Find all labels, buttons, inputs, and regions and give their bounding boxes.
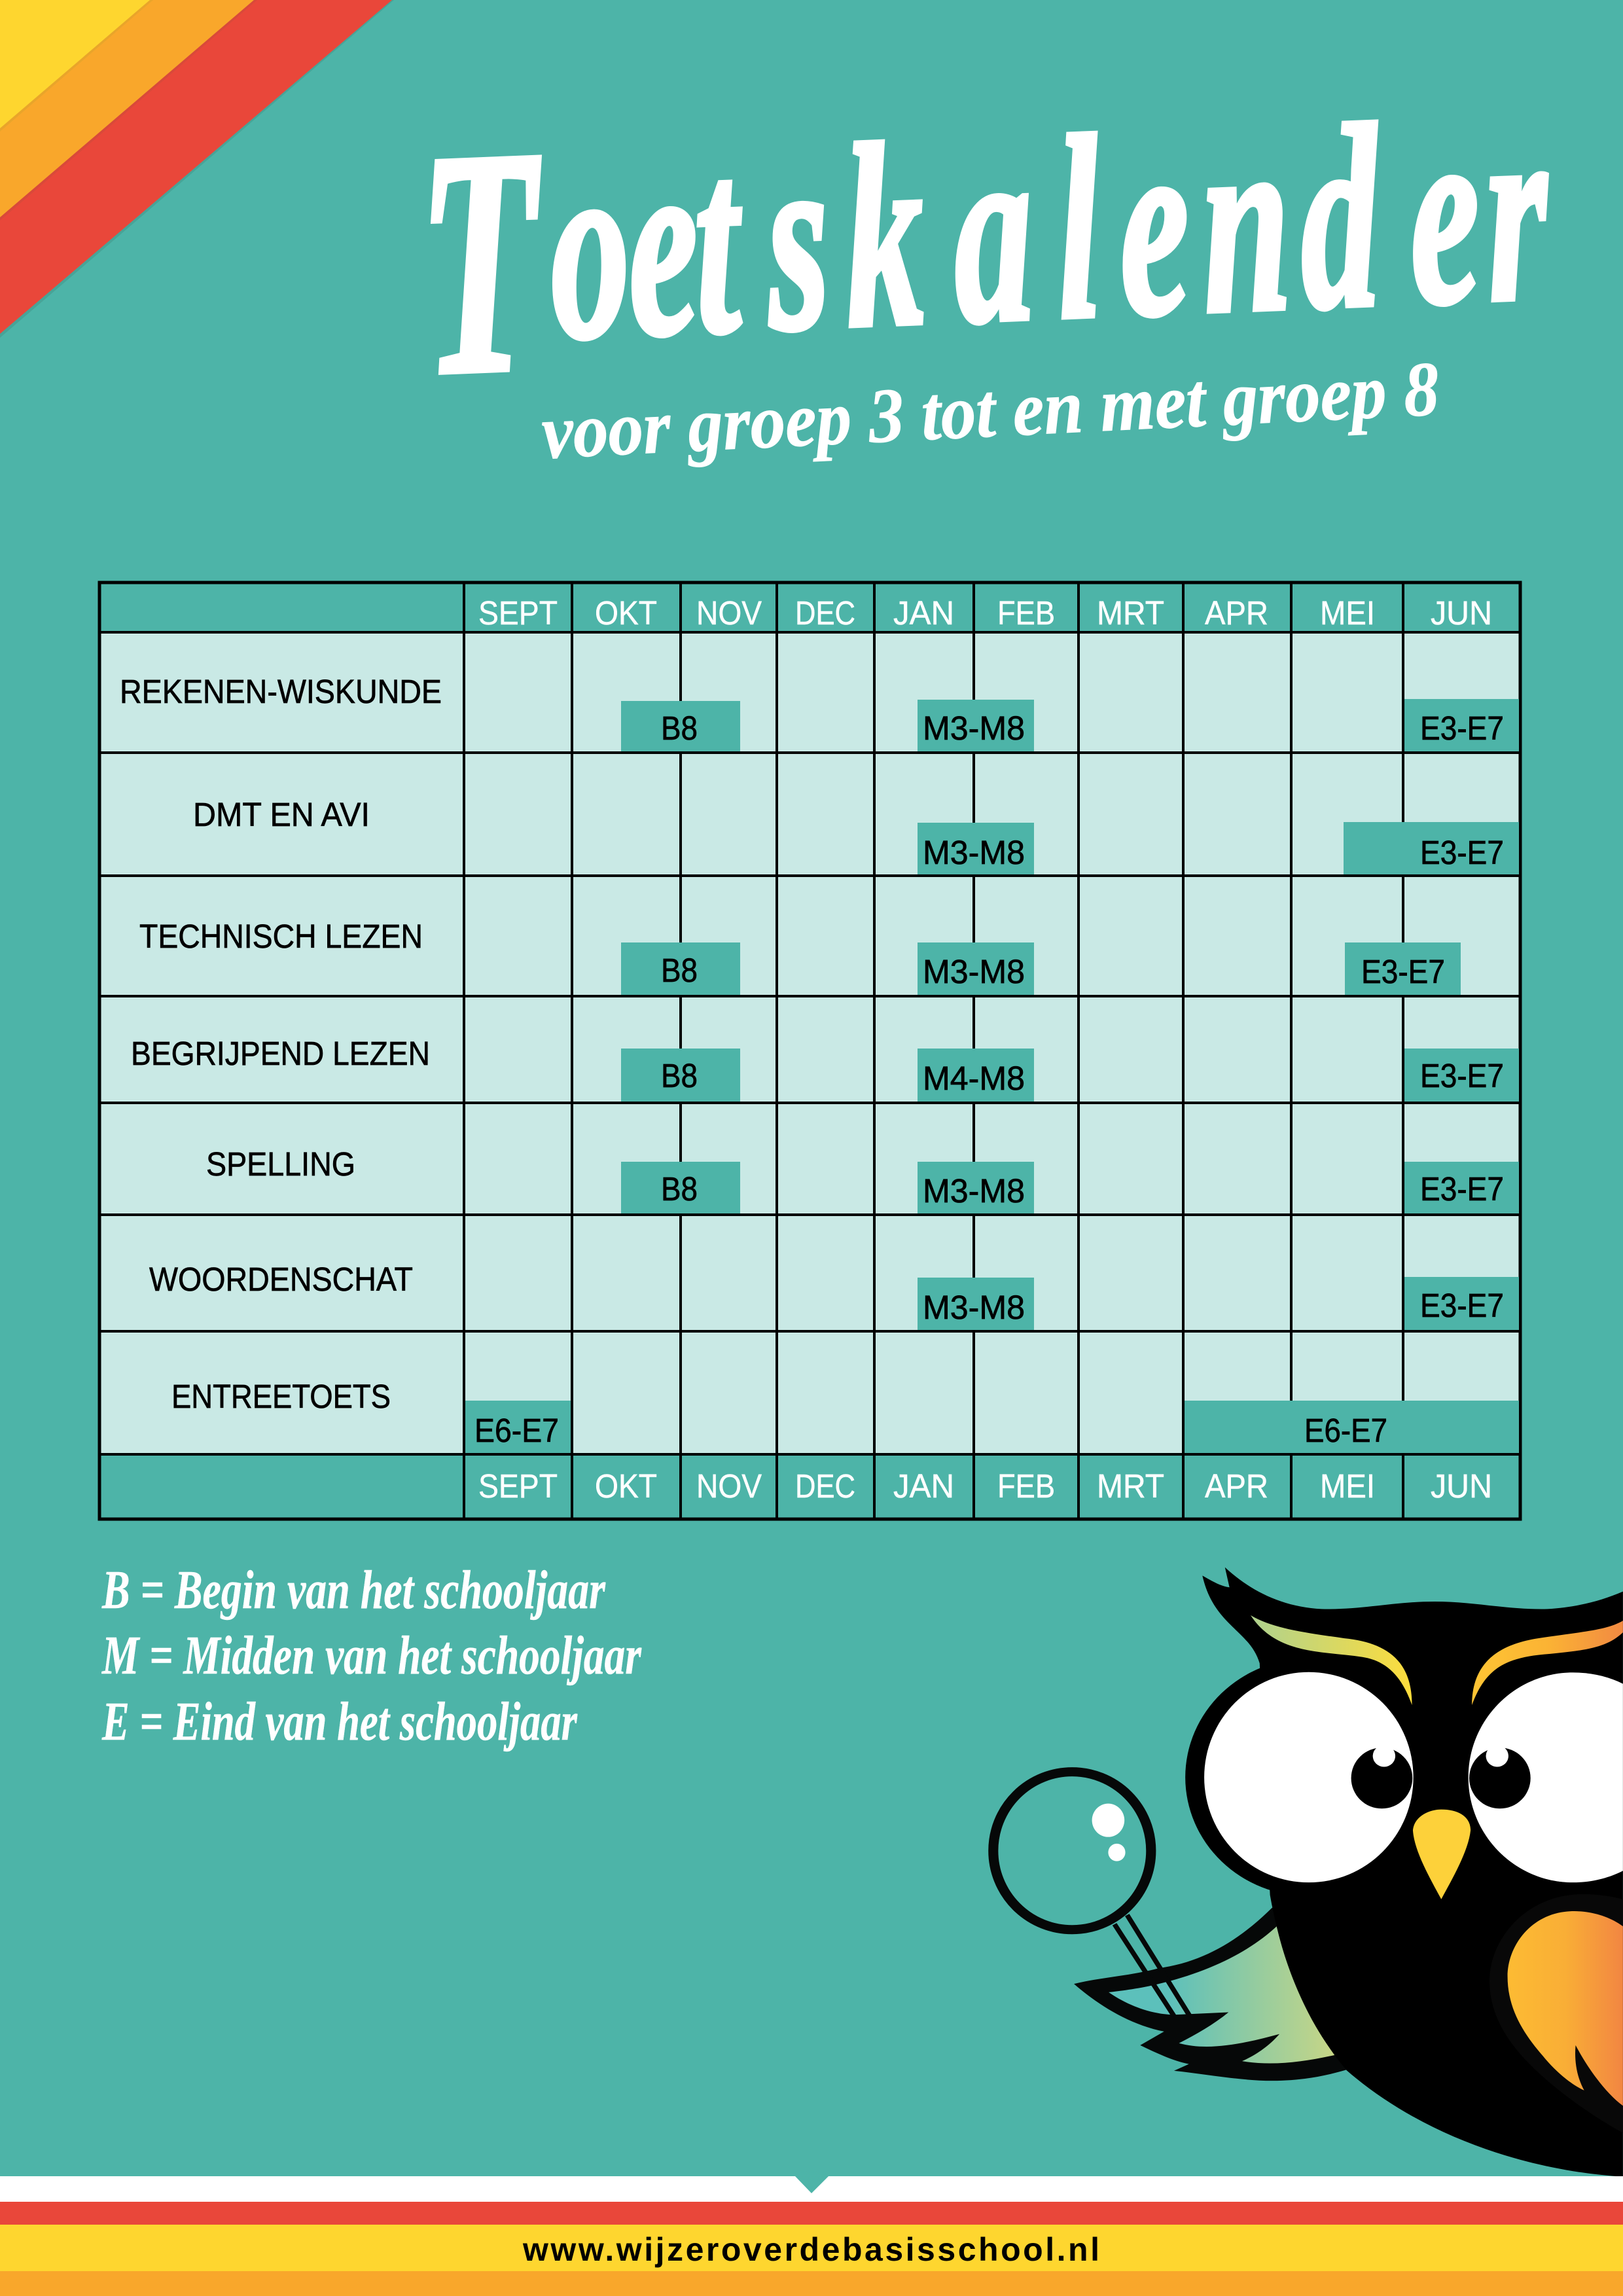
owl beak bbox=[1413, 1810, 1471, 1899]
row: spelling bars: M3-M8 bbox=[923, 1172, 1025, 1210]
table grid bbox=[99, 583, 1520, 1519]
row: woordenschat bars: E3-E7 bbox=[1420, 1287, 1504, 1324]
row: entreetoets bars bbox=[465, 1401, 1519, 1453]
row labels: REKENEN-WISKUNDE bbox=[120, 673, 442, 710]
top month header: NOV bbox=[696, 594, 762, 632]
row: technisch lezen bars bbox=[621, 942, 1461, 995]
row labels bbox=[120, 673, 442, 1415]
owl left eye bbox=[1204, 1672, 1414, 1882]
row: technisch lezen bars: M3-M8 bbox=[923, 953, 1025, 990]
top month header: OKT bbox=[595, 594, 657, 632]
row: rekenen-wiskunde bars: B8 bbox=[661, 709, 698, 747]
row labels: BEGRIJPEND LEZEN bbox=[131, 1035, 430, 1072]
top month header: MRT bbox=[1097, 594, 1164, 632]
owl wing holding magnifier bbox=[1074, 1907, 1349, 2081]
bottom month header: OKT bbox=[595, 1467, 657, 1505]
row: woordenschat bars bbox=[918, 1277, 1519, 1330]
row: begrijpend lezen bars bbox=[621, 1049, 1519, 1102]
row labels: ENTREETOETS bbox=[171, 1378, 391, 1415]
row: begrijpend lezen bars: M4-M8 bbox=[923, 1060, 1025, 1097]
corner stripes bbox=[0, 0, 394, 338]
row: begrijpend lezen bars: B8 bbox=[661, 1057, 698, 1094]
subtitle: voor groep 3 tot en met groep 8 bbox=[540, 346, 1441, 475]
row: woordenschat bars: M3-M8 bbox=[923, 1289, 1025, 1326]
row labels: SPELLING bbox=[206, 1145, 355, 1183]
owl body bbox=[1202, 1568, 1623, 2177]
owl left brow bbox=[1251, 1615, 1412, 1705]
bottom month header: DEC bbox=[795, 1467, 855, 1505]
row: dmt en avi bars bbox=[918, 822, 1519, 874]
row: rekenen-wiskunde bars bbox=[621, 699, 1519, 751]
legend: M = Midden van het schooljaar bbox=[101, 1625, 642, 1686]
legend bbox=[101, 1560, 642, 1752]
legend: B = Begin van het schooljaar bbox=[101, 1560, 606, 1621]
row: spelling bars: E3-E7 bbox=[1420, 1170, 1504, 1208]
row: spelling bars bbox=[621, 1162, 1519, 1213]
owl left pupil bbox=[1351, 1745, 1412, 1808]
top month header: APR bbox=[1205, 594, 1268, 632]
row: entreetoets bars: E6-E7 bbox=[474, 1412, 559, 1449]
bottom month header: JAN bbox=[893, 1467, 954, 1505]
title: T bbox=[413, 82, 554, 442]
row: dmt en avi bars: E3-E7 bbox=[1420, 834, 1504, 871]
row labels: DMT EN AVI bbox=[193, 796, 370, 833]
bottom month header: JUN bbox=[1431, 1467, 1492, 1505]
top month header: FEB bbox=[997, 594, 1055, 632]
row: spelling bars: B8 bbox=[661, 1170, 698, 1208]
row: entreetoets bars: E6-E7 bbox=[1304, 1412, 1387, 1449]
row labels: WOORDENSCHAT bbox=[149, 1261, 413, 1298]
website url: www.wijzeroverdebasisschool.nl bbox=[522, 2231, 1099, 2268]
top month header: SEPT bbox=[478, 594, 558, 632]
row: technisch lezen bars: B8 bbox=[661, 952, 698, 989]
bottom month header: SEPT bbox=[478, 1467, 558, 1505]
bottom month header bbox=[478, 1467, 1492, 1505]
owl mascot bbox=[993, 1568, 1623, 2177]
top month header: MEI bbox=[1320, 594, 1375, 632]
top month header bbox=[478, 594, 1492, 632]
bottom month header: NOV bbox=[696, 1467, 762, 1505]
owl right wing bbox=[1489, 1894, 1623, 2133]
bottom month header: APR bbox=[1205, 1467, 1268, 1505]
title: oetskalender bbox=[544, 65, 1556, 394]
bottom month header: MEI bbox=[1320, 1467, 1375, 1505]
legend: E = Eind van het schooljaar bbox=[101, 1691, 578, 1752]
row: rekenen-wiskunde bars: E3-E7 bbox=[1420, 709, 1504, 747]
footer bands bbox=[0, 2176, 1623, 2296]
row: begrijpend lezen bars: E3-E7 bbox=[1420, 1057, 1504, 1094]
owl right eye bbox=[1469, 1672, 1623, 1882]
row: technisch lezen bars: E3-E7 bbox=[1361, 953, 1445, 990]
table row backgrounds bbox=[99, 632, 1520, 1454]
footer notch bbox=[795, 2176, 829, 2193]
owl right brow bbox=[1472, 1621, 1623, 1705]
row: rekenen-wiskunde bars: M3-M8 bbox=[923, 709, 1025, 747]
top month header: JAN bbox=[893, 594, 954, 632]
top month header: DEC bbox=[795, 594, 855, 632]
owl right pupil bbox=[1469, 1745, 1531, 1808]
bottom month header: FEB bbox=[997, 1467, 1055, 1505]
row labels: TECHNISCH LEZEN bbox=[139, 918, 423, 955]
top month header: JUN bbox=[1431, 594, 1492, 632]
magnifying glass bbox=[993, 1772, 1190, 2016]
row: dmt en avi bars: M3-M8 bbox=[923, 834, 1025, 871]
owl left eye ring bbox=[1185, 1659, 1433, 1896]
bottom month header: MRT bbox=[1097, 1467, 1164, 1505]
calendar table bbox=[99, 583, 1520, 1519]
